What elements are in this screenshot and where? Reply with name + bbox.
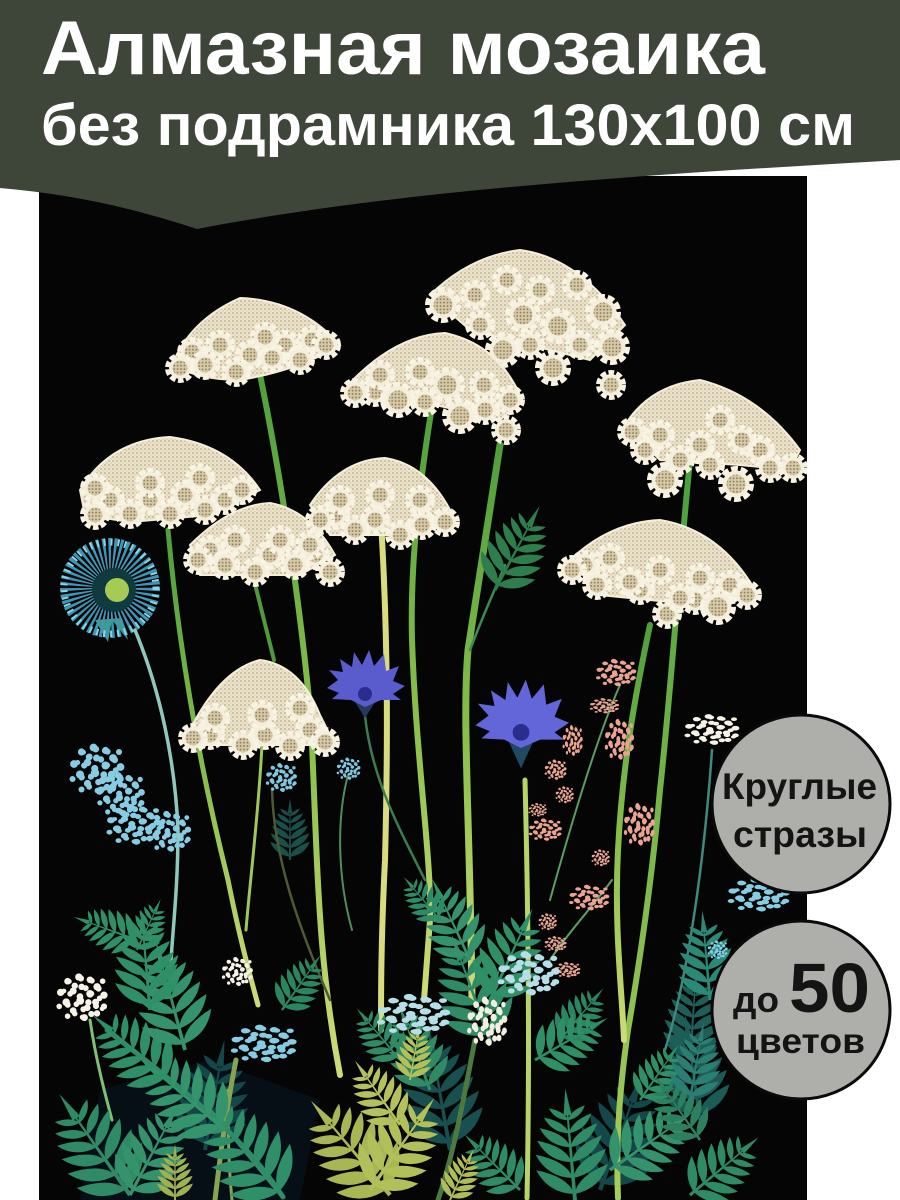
foliage: dark back leaves [170, 798, 734, 1200]
light-blue lace flower cluster [70, 740, 193, 855]
umbel: flower head 4 [620, 380, 806, 499]
umbel: flower head 8 [560, 520, 760, 626]
umbel: flower head 2 (largest) [428, 250, 627, 398]
foliage: main green fronds [27, 866, 777, 1200]
panel: diamond mosaic artwork [27, 176, 807, 1200]
cornflower: small violet-blue [327, 650, 405, 718]
stems of the tall plants [90, 365, 712, 1200]
umbel: flower head 5 [80, 437, 260, 528]
badge: up to 50 colours [712, 921, 890, 1099]
umbel: flower head 9 [180, 660, 338, 758]
badge text: Круглые: Круглые [722, 766, 877, 807]
umbel: flower head 1 [168, 298, 340, 384]
subtitle: без подрамника 130х100 см [41, 93, 855, 158]
small blue buds near centre [266, 758, 360, 792]
leafy sprig on central stem [481, 506, 546, 591]
pink meadow flower clusters [528, 657, 656, 978]
badge text: до: до [733, 979, 779, 1020]
badge text: стразы: стразы [733, 814, 867, 855]
badge text: цветов: цветов [736, 1022, 865, 1061]
umbel: flower head 3 [342, 333, 522, 442]
artwork black background [39, 176, 807, 1200]
banner shape [0, 0, 900, 229]
cornflower: large violet-blue [475, 680, 569, 768]
badge text: 50: 50 [789, 949, 870, 1027]
header banner [0, 0, 900, 229]
dark lower haze [80, 1060, 320, 1200]
badge: round rhinestones [712, 715, 890, 893]
foliage: lime fronds [157, 1022, 490, 1200]
title: Алмазная мозаика [41, 6, 766, 91]
thistle: blue spiky flower [64, 542, 156, 642]
umbel: flower head 6 [186, 503, 342, 584]
small flower clusters in the meadow [56, 712, 793, 1065]
umbel: flower head 7 [308, 458, 458, 548]
